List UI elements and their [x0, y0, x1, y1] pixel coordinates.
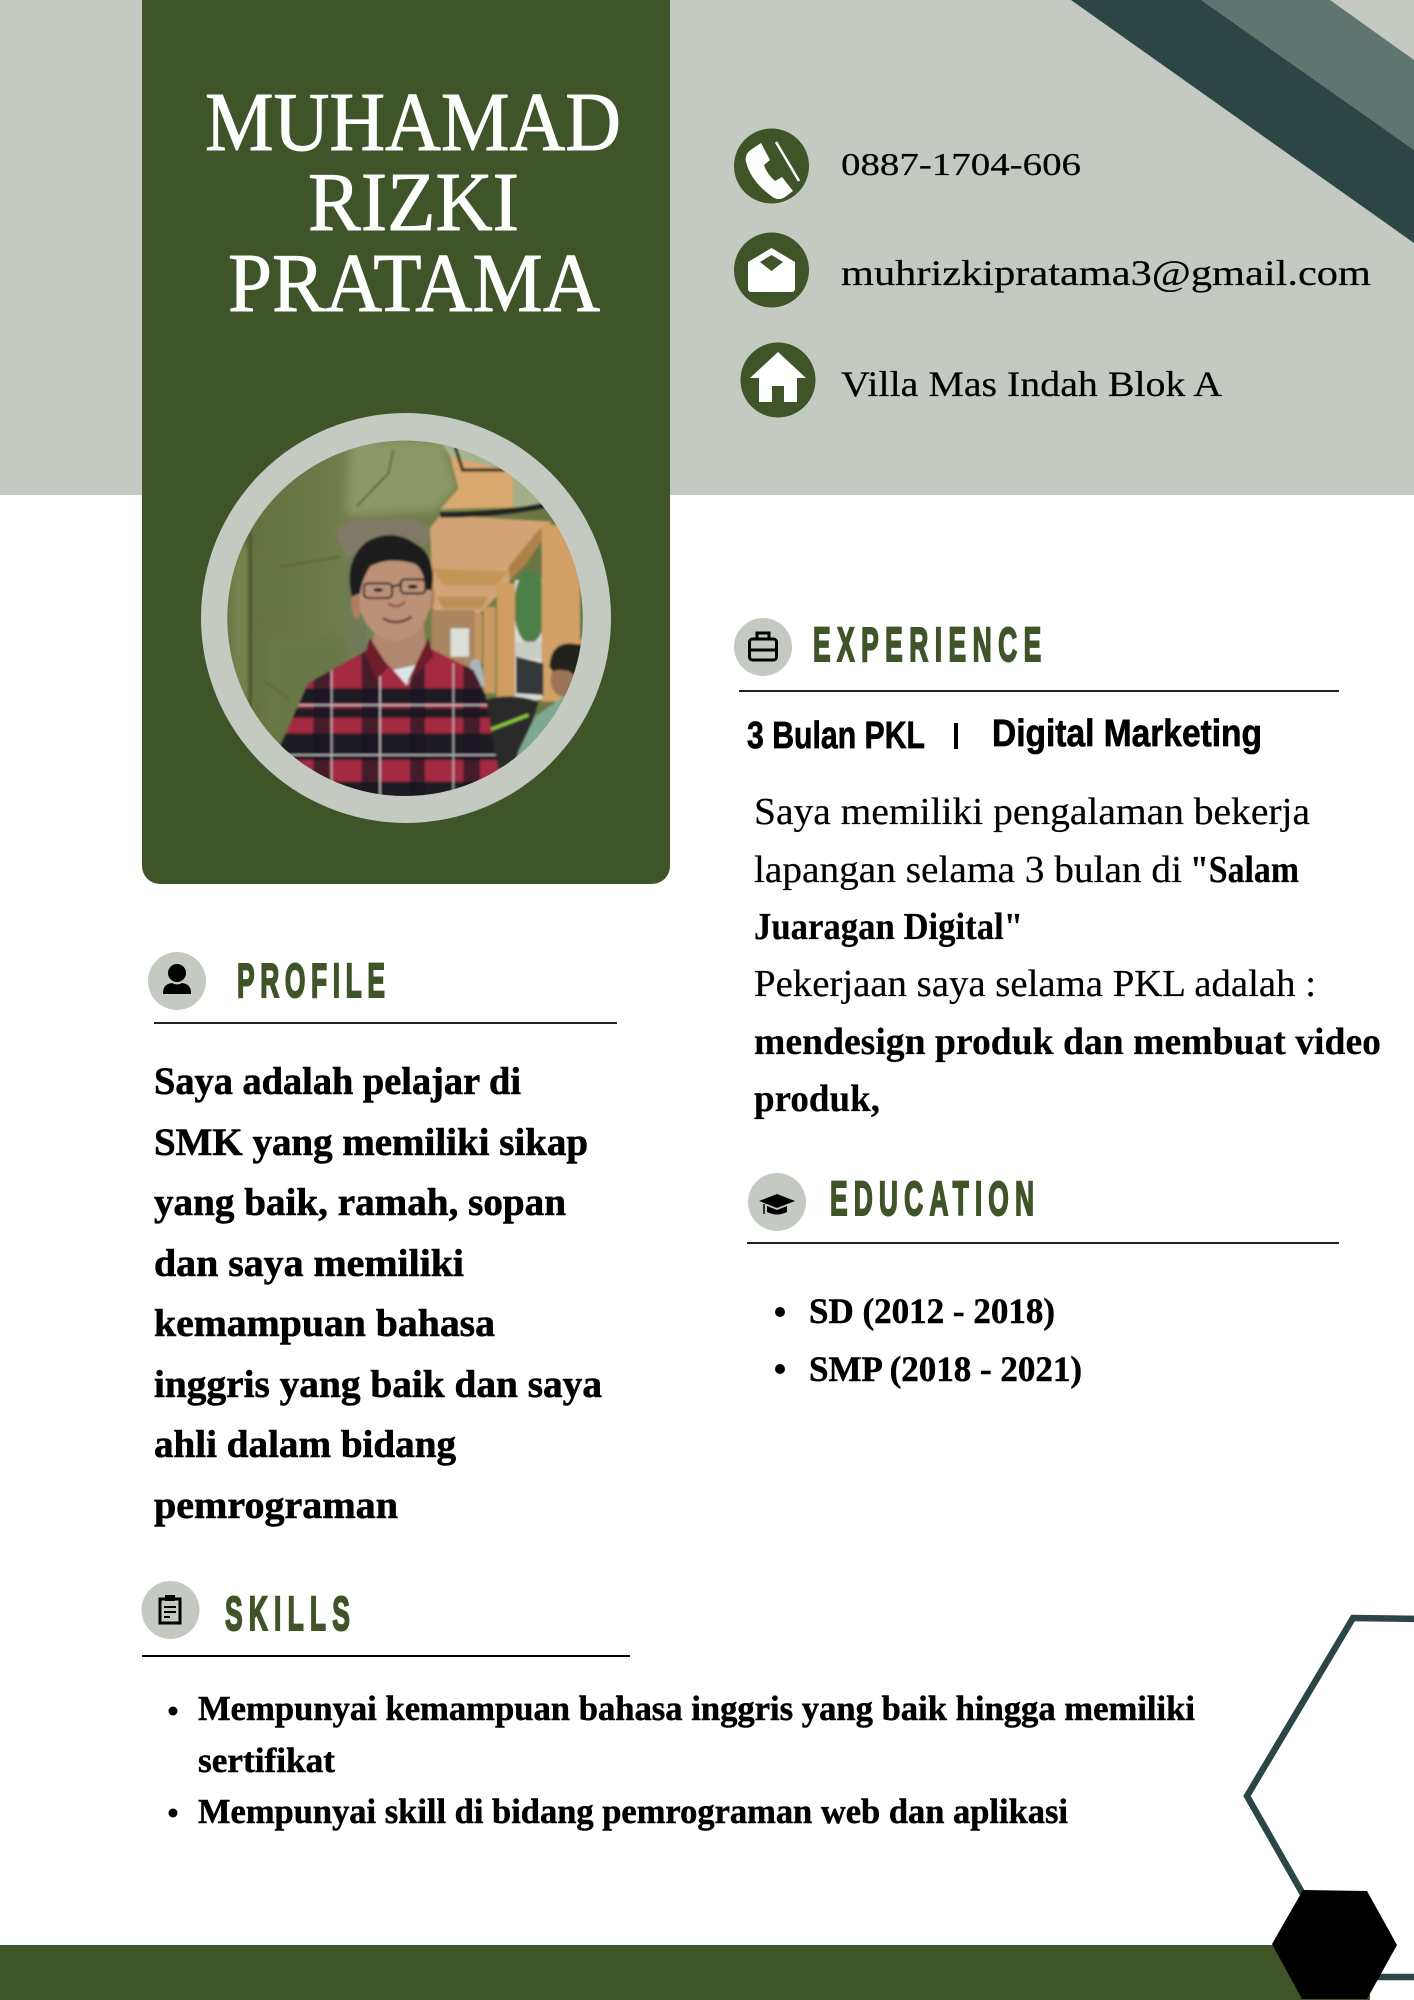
- footer bar: [0, 1945, 1370, 2000]
- skills list: sertifikat: [198, 1741, 335, 1780]
- experience description: "Salam: [1190, 849, 1299, 891]
- profile text: pemrograman: [154, 1484, 398, 1527]
- address: Villa Mas Indah Blok A: [841, 364, 1222, 404]
- profile text: kemampuan bahasa: [154, 1302, 495, 1345]
- panel: education: [747, 1173, 1339, 1389]
- education list: SD (2012 - 2018): [809, 1291, 1055, 1331]
- heading: experience: EXPERIENCE: [813, 619, 1041, 672]
- icon: briefcase: [734, 618, 792, 676]
- icon: house: [740, 342, 816, 418]
- title: name: MUHAMAD: [205, 76, 621, 169]
- name panel: [142, 0, 670, 884]
- education list: SMP (2018 - 2021): [809, 1349, 1082, 1389]
- experience description: lapangan selama 3 bulan di: [754, 849, 1182, 891]
- profile text: inggris yang baik dan saya: [154, 1363, 602, 1406]
- skills list: [168, 1689, 1195, 1831]
- profile text: yang baik, ramah, sopan: [154, 1181, 566, 1224]
- job title: [747, 713, 1262, 757]
- panel: profile: [148, 952, 617, 1527]
- black hexagon: [1272, 1890, 1397, 1999]
- heading: profile: PROFILE: [237, 955, 385, 1008]
- icon: envelope: [734, 232, 809, 308]
- profile text: dan saya memiliki: [154, 1242, 464, 1285]
- experience description: produk,: [754, 1078, 880, 1120]
- profile text: Saya adalah pelajar di: [154, 1060, 521, 1103]
- skills list: Mempunyai kemampuan bahasa inggris yang baik hingga memiliki: [198, 1689, 1195, 1728]
- experience description: [754, 791, 1381, 1120]
- header band: [0, 0, 1414, 495]
- heading: education: EDUCATION: [830, 1173, 1034, 1226]
- diagonal corner stripes: [1071, 0, 1414, 243]
- email address: muhrizkipratama3@gmail.com: [841, 253, 1371, 293]
- experience description: Juaragan Digital": [754, 906, 1023, 948]
- icon: graduation cap: [748, 1173, 806, 1231]
- icon: phone: [734, 128, 809, 204]
- heading: skills: SKILLS: [225, 1588, 350, 1641]
- title: name: RIZKI: [308, 156, 519, 249]
- job title: Digital Marketing: [992, 713, 1262, 755]
- experience description: Pekerjaan saya selama PKL adalah :: [754, 963, 1316, 1005]
- job title: 3 Bulan PKL: [747, 715, 925, 757]
- experience description: Saya memiliki pengalaman bekerja: [754, 791, 1310, 833]
- profile text: ahli dalam bidang: [154, 1423, 456, 1466]
- skills list: Mempunyai skill di bidang pemrograman web dan aplikasi: [198, 1792, 1068, 1831]
- education list: [775, 1291, 1082, 1389]
- profile photo: [201, 413, 611, 823]
- phone number: 0887-1704-606: [841, 146, 1081, 182]
- icon: person: [148, 952, 206, 1010]
- icon: clipboard: [142, 1581, 200, 1639]
- profile text: SMK yang memiliki sikap: [154, 1121, 588, 1164]
- title: name: PRATAMA: [228, 237, 600, 330]
- panel: skills: [142, 1581, 1195, 1831]
- panel: experience: [734, 618, 1381, 1120]
- hexagon outline: [1247, 1618, 1414, 1977]
- contact list: [734, 128, 1371, 418]
- profile text: [154, 1060, 602, 1527]
- experience description: mendesign produk dan membuat video: [754, 1021, 1381, 1063]
- title: name: [205, 76, 621, 330]
